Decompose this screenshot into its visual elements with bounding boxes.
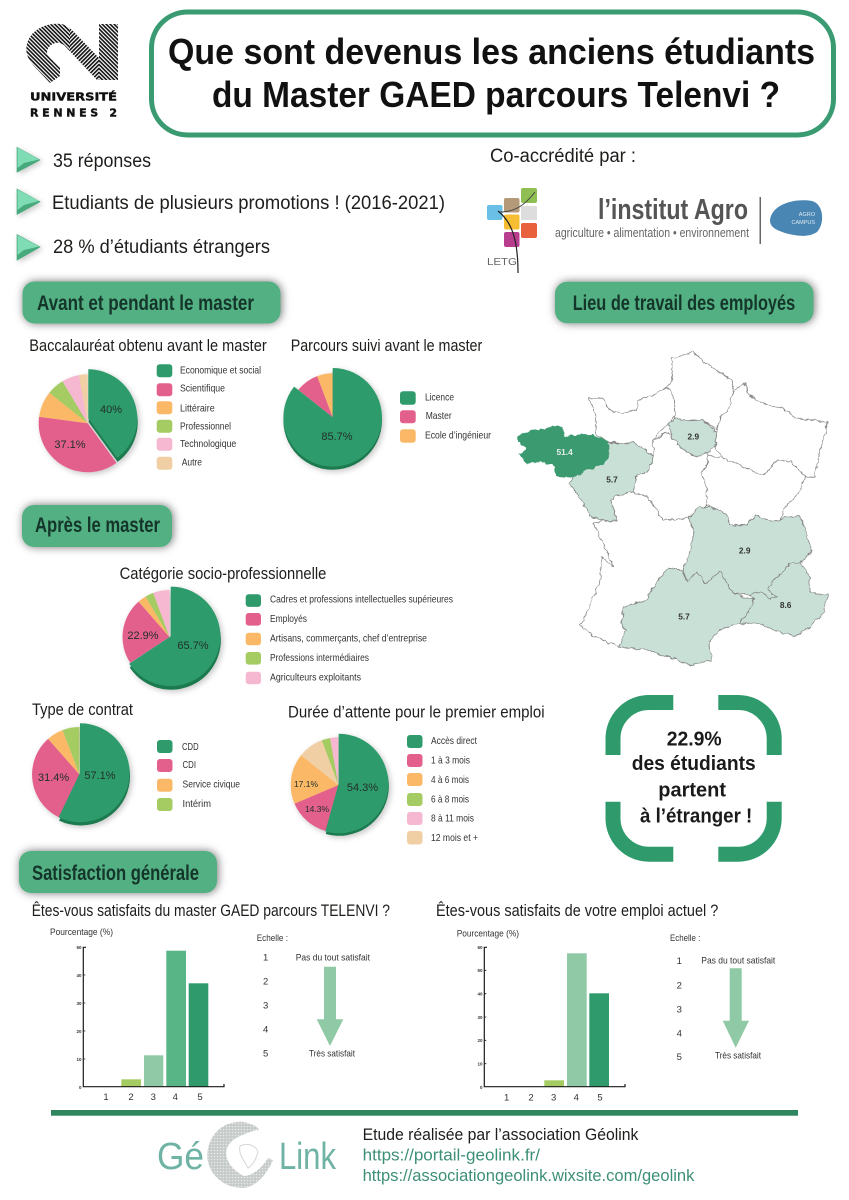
heading: Après le master: Après le master (35, 514, 160, 537)
bar chart: satisfaction job: 40 (477, 992, 483, 996)
bar chart: satisfaction master: 20 (76, 1029, 82, 1034)
legend: Type de contrat: CDD (182, 741, 199, 753)
legend: Catégorie: Artisans, commerçants, chef d’entreprise (270, 633, 427, 645)
footer credits: https://portail-geolink.fr/ (363, 1146, 540, 1165)
icon: bullet triangle 3 (17, 234, 41, 261)
pie chart: Durée d'attente: 17.1% (294, 779, 318, 789)
region: Bretagne (518, 427, 608, 477)
callout: 22.9% go abroad: à l’étranger ! (640, 806, 752, 828)
legend: Baccalauréat: Scientifique (180, 383, 225, 395)
pie chart: Baccalauréat (39, 369, 138, 472)
region: Île-de-France (668, 418, 717, 457)
icon: bullet triangle 1 (17, 147, 41, 173)
legend: Durée d'attente: 12 mois et + (431, 832, 478, 844)
bar chart: satisfaction master: 50 (76, 945, 82, 950)
region: Nouvelle-Aquitaine (580, 492, 694, 647)
legend: Durée d'attente (407, 735, 478, 844)
map values: 2.9 (688, 432, 699, 442)
co-accreditation heading: Co-accrédité par : (490, 146, 636, 167)
arrow: scale direction (723, 968, 749, 1048)
region: Occitanie (618, 568, 753, 665)
bar chart: satisfaction job: 10 (477, 1062, 483, 1066)
region: Normandie (589, 387, 675, 455)
heading: Satisfaction générale: Satisfaction générale (32, 862, 199, 885)
logo: LETG: LETG (487, 257, 517, 268)
legend: Catégorie: Employés (270, 613, 307, 625)
heading: Avant et pendant le master: Avant et pendant le master (37, 292, 254, 315)
legend: Baccalauréat: Littéraire (180, 402, 215, 414)
pie chart: Type de contrat: 57.1% (84, 770, 116, 782)
scale legend: satisfaction job: 2 (677, 980, 682, 991)
legend: Type de contrat: Intérim (182, 798, 211, 810)
chart title: Baccalauréat: Baccalauréat obtenu avant le master (29, 337, 267, 355)
pie chart: Catégorie: 65.7% (177, 640, 209, 652)
logo: Géolink: Gé (157, 1136, 204, 1178)
chart title: Type de contrat: Type de contrat (32, 701, 133, 719)
bar chart: satisfaction master: Pourcentage (%) (50, 927, 113, 938)
legend: Parcours: Master (426, 410, 452, 422)
legend: Durée d'attente: 1 à 3 mois (431, 755, 470, 767)
map values: 2.9 (739, 545, 751, 555)
chart title: Durée d'attente: Durée d’attente pour le premier emploi (288, 704, 545, 722)
legend: Catégorie: Cadres et professions intellectuelles supérieures (270, 594, 453, 606)
pie chart: Baccalauréat: 37.1% (54, 439, 86, 451)
scale legend: satisfaction master: 3 (263, 1001, 268, 1012)
arrow: scale direction (317, 967, 343, 1046)
bar chart: satisfaction job: 50 (477, 968, 483, 973)
legend: Parcours: Licence (425, 391, 454, 403)
legend: Catégorie (246, 594, 453, 684)
fact: foreign students: 28 % d’étudiants étrangers (53, 237, 270, 258)
bar chart: satisfaction master (50, 927, 224, 1103)
legend: Durée d'attente: 6 à 8 mois (431, 793, 469, 805)
bar chart: satisfaction job: 30 (477, 1015, 483, 1020)
bar chart: satisfaction master: 1 (103, 1092, 109, 1103)
region: Centre-Val de Loire (633, 432, 708, 520)
scale legend: satisfaction job: 1 (677, 956, 682, 967)
pie chart: Parcours (283, 368, 382, 470)
legend: Baccalauréat (157, 364, 261, 470)
scale legend: satisfaction master: 5 (263, 1049, 268, 1060)
title box: du Master GAED parcours Telenvi ? (212, 74, 780, 115)
legend: Type de contrat (157, 740, 240, 811)
bar chart: satisfaction master: 3 (151, 1092, 156, 1103)
heading: Lieu de travail des employés (555, 282, 814, 323)
footer credits (363, 1125, 695, 1185)
bar chart: satisfaction job: 20 (477, 1038, 483, 1043)
footer credits: https://associationgeolink.wixsite.com/geolink (363, 1166, 695, 1185)
logo: Géolink: Link (279, 1136, 337, 1178)
pie chart: Durée d'attente (291, 734, 389, 836)
scale legend: satisfaction job: Pas du tout satisfait (701, 955, 776, 966)
bar chart: satisfaction master: 40 (76, 973, 82, 978)
legend: Baccalauréat: Economique et social (180, 365, 261, 377)
scale legend: satisfaction master: Pas du tout satisfait (296, 953, 370, 964)
legend: Baccalauréat: Autre (182, 457, 202, 469)
chart title: satisfaction job: Êtes-vous satisfaits de votre emploi actuel ? (436, 901, 718, 920)
callout: 22.9% go abroad: des étudiants (632, 753, 756, 775)
bar chart: satisfaction master: 5 (197, 1092, 203, 1103)
logo: l'institut Agro (555, 194, 822, 244)
scale legend: satisfaction job: Echelle : (670, 933, 700, 944)
map of France: workplace of employees (518, 352, 828, 665)
scale legend: satisfaction job: 4 (677, 1028, 682, 1039)
legend: Durée d'attente: 4 à 6 mois (431, 774, 469, 786)
bar chart: satisfaction master: 30 (76, 1001, 82, 1006)
map values: 5.7 (678, 612, 690, 622)
bar chart: satisfaction job: 60 (477, 945, 483, 950)
fact: promotions: Etudiants de plusieurs promotions ! (2016-2021) (52, 193, 445, 214)
region: Pays de la Loire (570, 442, 653, 521)
scale legend: satisfaction master: 1 (263, 953, 268, 964)
scale legend: satisfaction master: Echelle : (257, 933, 288, 944)
scale legend: satisfaction master: 4 (263, 1025, 268, 1036)
scale legend: satisfaction master: Très satisfait (309, 1049, 355, 1060)
key facts list (17, 147, 445, 261)
legend: Baccalauréat: Technologique (180, 438, 236, 450)
chart title: Catégorie socio-professionnelle: Catégorie socio-professionnelle (120, 565, 326, 583)
bar chart: satisfaction job: 1 (504, 1093, 509, 1104)
chart title: satisfaction master: Êtes-vous satisfaits du master GAED parcours TELENVI ? (32, 901, 390, 920)
region: Provence-Alpes-Côte d'Azur (738, 563, 828, 636)
scale legend: satisfaction job: 5 (677, 1052, 682, 1063)
pie chart: Durée d'attente: 14.3% (305, 804, 329, 814)
legend: Catégorie: Agriculteurs exploitants (270, 672, 361, 684)
logo: Université Rennes 2 (26, 24, 118, 117)
heading: Avant et pendant le master (22, 282, 280, 324)
callout: 22.9% go abroad: 22.9% (667, 729, 722, 751)
bar chart: satisfaction master: 2 (128, 1092, 134, 1103)
callout: 22.9% go abroad (613, 702, 774, 854)
logo: Université Rennes 2: UNIVERSITÉ (30, 91, 117, 104)
logo: l'institut Agro: CAMPUS (791, 220, 815, 226)
region: Hauts-de-France (667, 352, 733, 430)
scale legend: satisfaction master: 2 (263, 977, 268, 988)
logo: Géolink (157, 1122, 337, 1188)
scale legend: satisfaction master (257, 933, 370, 1060)
map values: 5.7 (606, 474, 618, 484)
bar chart: satisfaction master: 0 (79, 1085, 82, 1090)
logo: l'institut Agro: AGRO (799, 212, 816, 218)
pie chart: Durée d'attente: 54.3% (347, 782, 378, 794)
bar chart: satisfaction job: Pourcentage (%) (457, 929, 519, 940)
bar chart: satisfaction master: 10 (76, 1057, 82, 1062)
region: Bourgogne-Franche-Comté (702, 455, 805, 525)
title box (152, 12, 834, 135)
icon: dotted globe (207, 1122, 273, 1188)
pie chart: Type de contrat: 31.4% (38, 772, 69, 784)
bar chart: satisfaction job: 3 (551, 1093, 556, 1104)
bar chart: satisfaction job (457, 929, 625, 1104)
legend: Parcours: Ecole d’ingénieur (425, 429, 491, 441)
bar chart: satisfaction job: 0 (480, 1085, 483, 1090)
bar chart: satisfaction master: 4 (173, 1092, 178, 1103)
title box: Que sont devenus les anciens étudiants (168, 31, 815, 72)
legend: Parcours (400, 391, 491, 443)
bar chart: satisfaction job: 2 (528, 1093, 534, 1104)
logo: l'institut Agro: agriculture • alimentation • environnement (555, 225, 749, 240)
footer divider (51, 1110, 798, 1116)
icon: bullet triangle 2 (17, 188, 41, 215)
bar chart: satisfaction job: 5 (597, 1093, 603, 1104)
legend: Type de contrat: Service civique (182, 779, 240, 791)
map values: 51.4 (557, 447, 573, 457)
fact: responses: 35 réponses (53, 151, 151, 172)
pie chart: Baccalauréat: 40% (100, 404, 122, 416)
scale legend: satisfaction job: Très satisfait (715, 1051, 761, 1062)
legend: Baccalauréat: Professionnel (180, 420, 231, 432)
pie chart: Parcours: 85.7% (321, 431, 353, 443)
map regions (518, 352, 828, 665)
legend: Catégorie: Professions intermédiaires (270, 652, 369, 664)
legend: Durée d'attente: Accès direct (431, 735, 477, 747)
footer credits: Etude réalisée par l’association Géolink (363, 1125, 639, 1144)
pie chart: Type de contrat (32, 723, 130, 825)
logo: l'institut Agro: l’institut Agro (598, 194, 748, 226)
region: Auvergne-Rhône-Alpes (683, 507, 812, 599)
pie chart: Catégorie: 22.9% (127, 630, 159, 642)
callout: 22.9% go abroad: partent (658, 780, 726, 802)
map values: 8.6 (780, 600, 792, 610)
scale legend: satisfaction job (670, 933, 776, 1063)
heading: Après le master (22, 505, 172, 547)
chart title: Parcours: Parcours suivi avant le master (291, 337, 483, 355)
region: Grand Est (715, 383, 828, 477)
legend: Durée d'attente: 8 à 11 mois (431, 813, 474, 825)
logo: LETG (487, 188, 537, 273)
heading: Satisfaction générale (19, 851, 217, 893)
pie chart: Catégorie (123, 587, 221, 690)
scale legend: satisfaction job: 3 (677, 1004, 682, 1015)
map values (557, 432, 792, 622)
logo: Université Rennes 2: RENNES 2 (30, 107, 117, 120)
legend: Type de contrat: CDI (182, 759, 196, 771)
bar chart: satisfaction job: 4 (574, 1093, 579, 1104)
